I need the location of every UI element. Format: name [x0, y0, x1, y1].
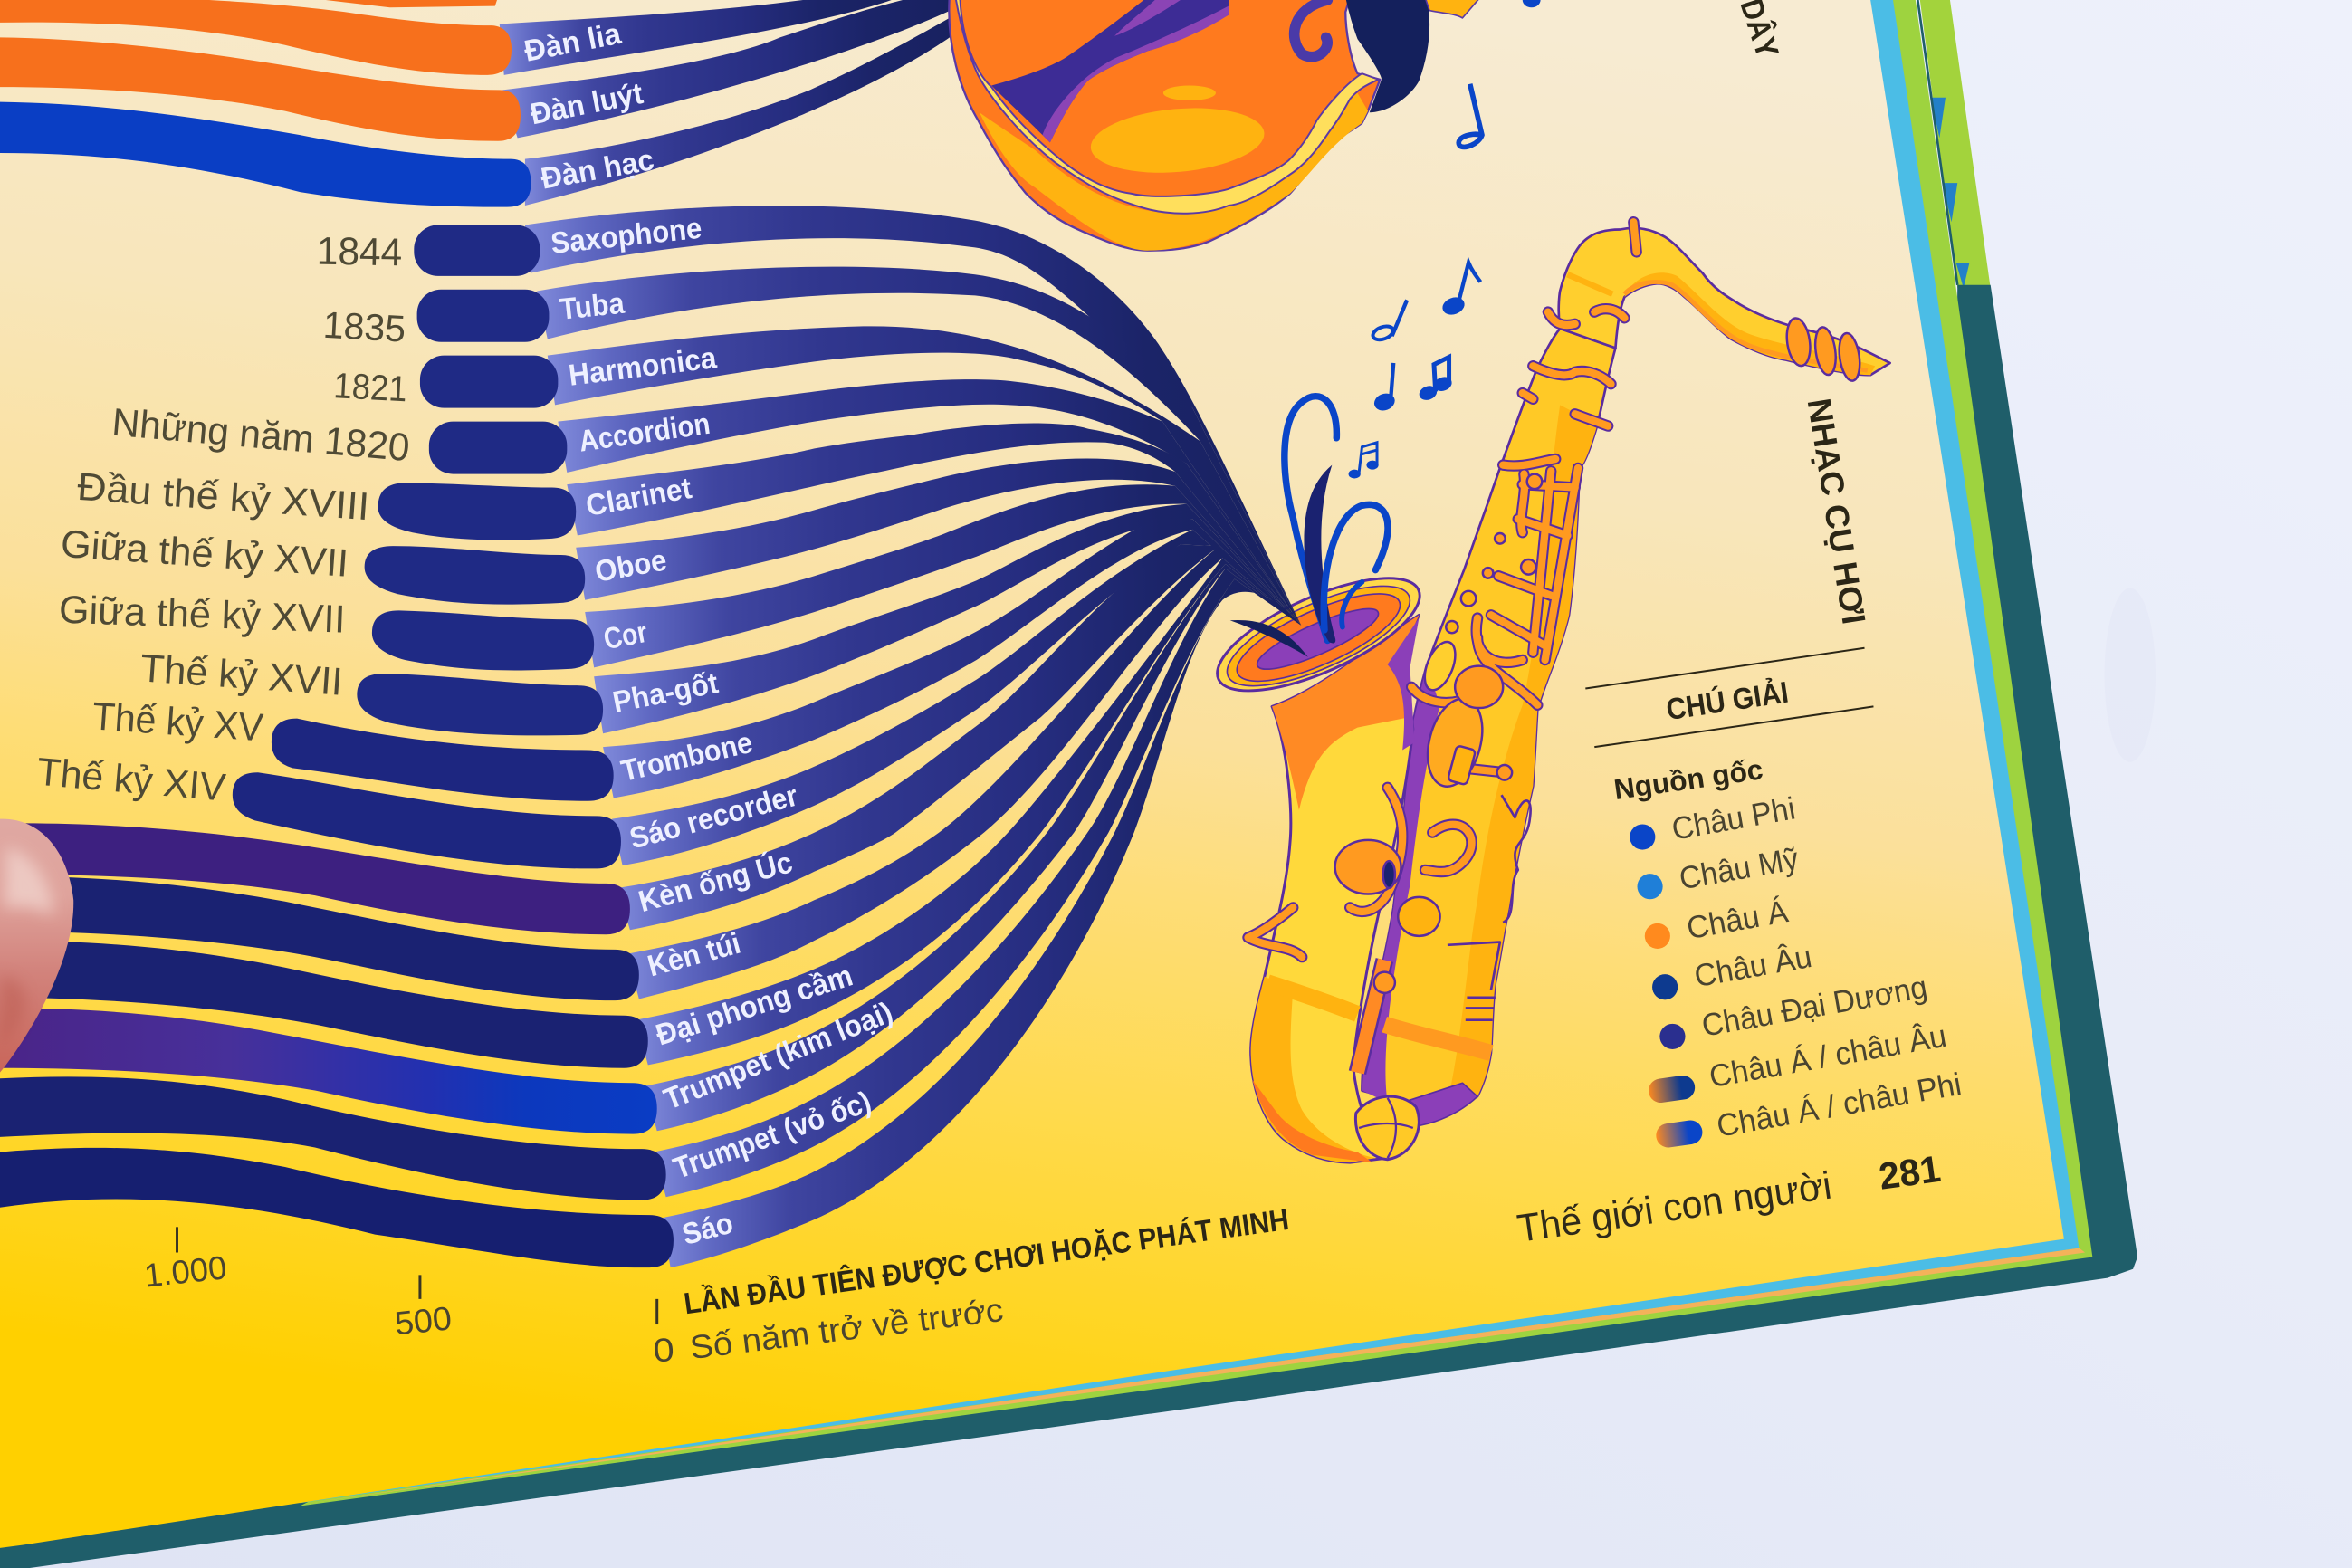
violin purple sliver [1114, 0, 1185, 36]
date: Thế kỷ XVII: Thế kỷ XVII [139, 646, 344, 704]
violin gold highlight small [1163, 85, 1216, 100]
key mechanism outline [1248, 222, 1637, 957]
band: Trumpet (vỏ ốc): Trumpet (vỏ ốc) [669, 1085, 875, 1186]
band: Kèn túi: Kèn túi [645, 927, 744, 983]
string instrument bands [0, 0, 960, 207]
band: Trombone: Trombone [618, 726, 756, 789]
wind instrument bands [0, 206, 1301, 1267]
saxophone illustration [1203, 222, 1890, 1162]
date: Thế kỷ XV: Thế kỷ XV [91, 694, 264, 750]
violin gold highlight large [1088, 101, 1267, 179]
key blobs [1335, 474, 1542, 993]
band: Accordion: Accordion [577, 407, 712, 459]
band: Sáo [0, 579, 1301, 1267]
band: Tuba: Tuba [559, 287, 626, 327]
band: Kèn ống Úc [0, 544, 1301, 934]
legend item: Châu Á / châu Phi: Châu Á / châu Phi [1714, 1066, 1964, 1144]
orange rod [1357, 960, 1384, 1073]
note 1 [1441, 263, 1480, 317]
date: Giữa thế kỷ XVII second: Giữa thế kỷ XVII [58, 588, 346, 642]
band: Harmonica: Harmonica [567, 341, 719, 393]
band: Đàn luýt [0, 0, 960, 141]
band: Trombone [272, 519, 1301, 801]
axis subtitle: Số năm trở về trước [688, 1291, 1005, 1366]
band: Sáo recorder [233, 530, 1301, 868]
date: 1821: 1821 [332, 366, 408, 409]
band: Kèn ống Úc: Kèn ống Úc [635, 845, 796, 919]
legend item: Châu Mỹ: Châu Mỹ [1677, 842, 1802, 896]
finger holding the book [0, 819, 73, 1073]
key mechanism fill [1248, 222, 1637, 957]
band: Trumpet (kim loại) [0, 564, 1301, 1134]
band: Đàn hạc [0, 12, 960, 207]
band: Trumpet (vỏ ốc) [0, 569, 1301, 1200]
band: Đàn luýt: Đàn luýt [528, 77, 645, 131]
page number: 281 [1877, 1148, 1943, 1198]
legend item: Châu Âu [1652, 939, 1814, 999]
tick: 1000 [142, 1227, 228, 1295]
legend item: Châu Á / châu Âu [1647, 1018, 1949, 1104]
legend item: Châu Á / châu Âu: Châu Á / châu Âu [1707, 1018, 1949, 1095]
note 5 [1349, 443, 1378, 478]
band: Đại phong cầm [0, 558, 1301, 1068]
section heading: wind instruments: NHẠC CỤ HƠI [1801, 396, 1873, 626]
tick: 0 [652, 1299, 675, 1369]
bell gold lower shade [1251, 977, 1375, 1162]
teal hard cover [0, 285, 2137, 1568]
blue note near violin [1458, 84, 1482, 147]
bell rim gold ring [1215, 567, 1422, 706]
violin body [949, 0, 1380, 251]
gold tip at top [1425, 0, 1480, 18]
legend item: Châu Đại Dương: Châu Đại Dương [1699, 970, 1930, 1044]
tick: 1000: 1.000 [142, 1248, 228, 1295]
faint stain on surface [2105, 588, 2156, 762]
violin gold lower region [980, 93, 1368, 251]
band: Kèn túi [0, 546, 1301, 1000]
blue note cut at top [1523, 0, 1541, 7]
back cover green strip with icons [1917, 0, 1991, 288]
page footer [1515, 1148, 1943, 1251]
tube gold shading [1448, 405, 1598, 1103]
violin f-hole scroll [1295, 0, 1327, 57]
band: Đàn hạc: Đàn hạc [539, 143, 656, 196]
band: Pha-gốt: Pha-gốt [610, 666, 721, 720]
bell mouth purple [1251, 598, 1384, 680]
note 4 [1419, 357, 1453, 401]
neck [1559, 228, 1890, 375]
bell purple inner shade [1388, 618, 1419, 750]
sound swirls entering saxophone [1230, 397, 1388, 657]
band: Đại phong cầm: Đại phong cầm [652, 959, 856, 1052]
bell bands [1267, 982, 1357, 1014]
bell rim outer [1203, 556, 1434, 713]
axis title: LẦN ĐẦU TIÊN ĐƯỢC CHƠI HOẶC PHÁT MINH [682, 1202, 1291, 1321]
violin purple shadow [991, 0, 1229, 142]
band: Harmonica [420, 326, 1301, 626]
band: Đàn lia: Đàn lia [521, 17, 624, 69]
legend rules [1585, 648, 1873, 747]
legend item: Châu Phi: Châu Phi [1669, 791, 1798, 847]
note 2 [1371, 300, 1407, 342]
saxophone keyed tube [1362, 329, 1615, 1110]
navy band bundle behind violin [1345, 0, 1429, 112]
date labels [35, 230, 411, 810]
blue page stack [300, 0, 2079, 1503]
date: Những năm 1820: Những năm 1820 [110, 401, 411, 470]
timeline axis [142, 1202, 1291, 1369]
band: Sáo: Sáo [679, 1207, 737, 1252]
band: Sáo recorder: Sáo recorder [626, 779, 801, 856]
tick: 500 [393, 1275, 454, 1343]
orange page stack [300, 1248, 2085, 1505]
legend item: Châu Á: Châu Á [1684, 894, 1792, 946]
tick: 500: 500 [393, 1299, 454, 1343]
violin rim stripe [955, 0, 1379, 214]
band: Đàn lia [0, 0, 900, 75]
note 3 [1372, 363, 1396, 413]
bell orange bottom shade [1253, 1080, 1372, 1162]
date: 1835: 1835 [322, 304, 406, 350]
navy leaf [1304, 465, 1335, 643]
legend item: Châu Mỹ [1637, 842, 1802, 899]
band: Saxophone: Saxophone [550, 212, 703, 261]
date: Giữa thế kỷ XVII: Giữa thế kỷ XVII [60, 522, 349, 586]
legend [1585, 648, 1964, 1149]
key outline drips and ladder [1448, 795, 1531, 1020]
violin light purple stripe [1043, 6, 1229, 142]
band: Oboe: Oboe [592, 544, 669, 589]
band: Oboe [365, 459, 1301, 626]
band: Accordion [429, 379, 1301, 626]
legend subtitle: Nguồn gốc [1612, 753, 1765, 806]
band: Trumpet (kim loại): Trumpet (kim loại) [659, 996, 897, 1117]
date: Đầu thế kỷ XVIII: Đầu thế kỷ XVIII [76, 465, 370, 529]
mouthpiece rings [1784, 317, 1862, 382]
band: Cor: Cor [601, 616, 650, 656]
navy tip at bell [1230, 620, 1308, 657]
tube purple shadow [1362, 666, 1440, 1103]
legend item: Châu Á [1645, 894, 1792, 949]
green page stack [300, 0, 2092, 1506]
band: Clarinet: Clarinet [583, 472, 694, 523]
legend item: Châu Âu: Châu Âu [1692, 939, 1814, 994]
blue swirl large [1285, 397, 1336, 640]
bell orange upper shade [1272, 615, 1419, 810]
blue swirl loop [1324, 504, 1388, 630]
bottom bow cap [1355, 1096, 1419, 1160]
neck upper shade [1567, 274, 1612, 294]
band: Clarinet [378, 423, 1301, 626]
tick: 0: 0 [652, 1331, 675, 1369]
neck gold lower half [1624, 272, 1875, 375]
date: 1844: 1844 [316, 230, 403, 274]
legend title: CHÚ GIẢI [1664, 675, 1791, 727]
neck shade [1624, 282, 1868, 370]
footer section name: Thế giới con người [1515, 1164, 1834, 1251]
sliver at top [300, 0, 498, 7]
bell rim orange [1227, 577, 1410, 698]
band: Pha-gốt [357, 504, 1301, 735]
music notes near saxophone [1349, 263, 1480, 478]
saxophone bell body [1251, 615, 1419, 1162]
band: Saxophone [414, 206, 1301, 626]
blue swirl small [1342, 582, 1362, 627]
date: Thế kỷ XIV: Thế kỷ XIV [35, 751, 227, 810]
violin illustration [949, 0, 1541, 251]
bottom purple connector [1388, 1083, 1477, 1127]
band: Cor [372, 484, 1301, 670]
band: Tuba [417, 267, 1301, 626]
